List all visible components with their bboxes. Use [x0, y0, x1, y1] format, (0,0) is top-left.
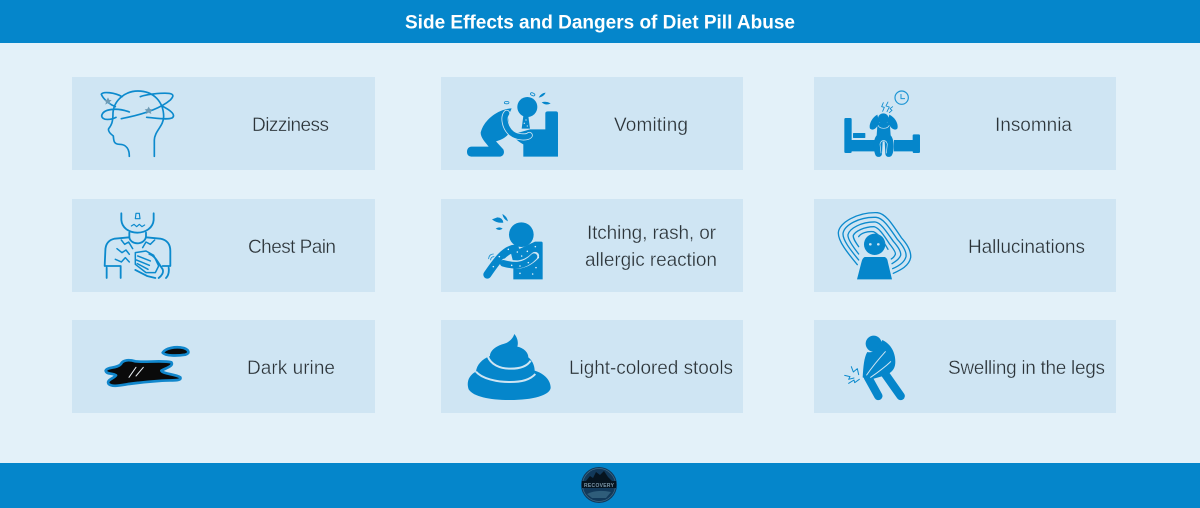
logo badge: RECOVERY — [584, 483, 615, 489]
panel: hallucinations — [814, 199, 1116, 292]
label: Chest Pain — [248, 237, 336, 258]
panel: dizziness — [72, 77, 375, 170]
label — [585, 223, 717, 271]
panel: insomnia — [814, 77, 1116, 170]
icon: dark puddle — [106, 347, 188, 386]
label: Itching, rash, or — [587, 223, 717, 244]
icon: person awake on bed — [844, 91, 920, 157]
title: Side Effects and Dangers of Diet Pill Abuse — [405, 12, 795, 34]
label: Hallucinations — [968, 237, 1085, 258]
icon: person with swirling rings — [838, 213, 911, 279]
icon: person scratching rash — [487, 214, 543, 279]
label: Vomiting — [614, 115, 688, 136]
label: Dizziness — [252, 115, 329, 136]
label: Insomnia — [995, 115, 1072, 136]
label: Light-colored stools — [569, 358, 733, 379]
header banner — [0, 0, 1200, 43]
icon: stool pile — [468, 334, 551, 400]
panel: vomiting — [441, 77, 743, 170]
panel: light-colored stools — [441, 320, 743, 413]
footer banner — [0, 463, 1200, 508]
label: Dark urine — [247, 358, 335, 379]
panel: itching — [441, 199, 743, 292]
label: allergic reaction — [585, 250, 717, 271]
icon: person vomiting into toilet — [467, 92, 558, 157]
panel: swelling in the legs — [814, 320, 1116, 413]
label: Swelling in the legs — [948, 358, 1105, 379]
panel: dark urine — [72, 320, 375, 413]
icon: person holding leg — [845, 336, 901, 396]
icon: dizzy head — [101, 91, 174, 156]
logo badge — [581, 467, 617, 503]
panel: chest pain — [72, 199, 375, 292]
icon: chest pain torso — [105, 213, 170, 278]
